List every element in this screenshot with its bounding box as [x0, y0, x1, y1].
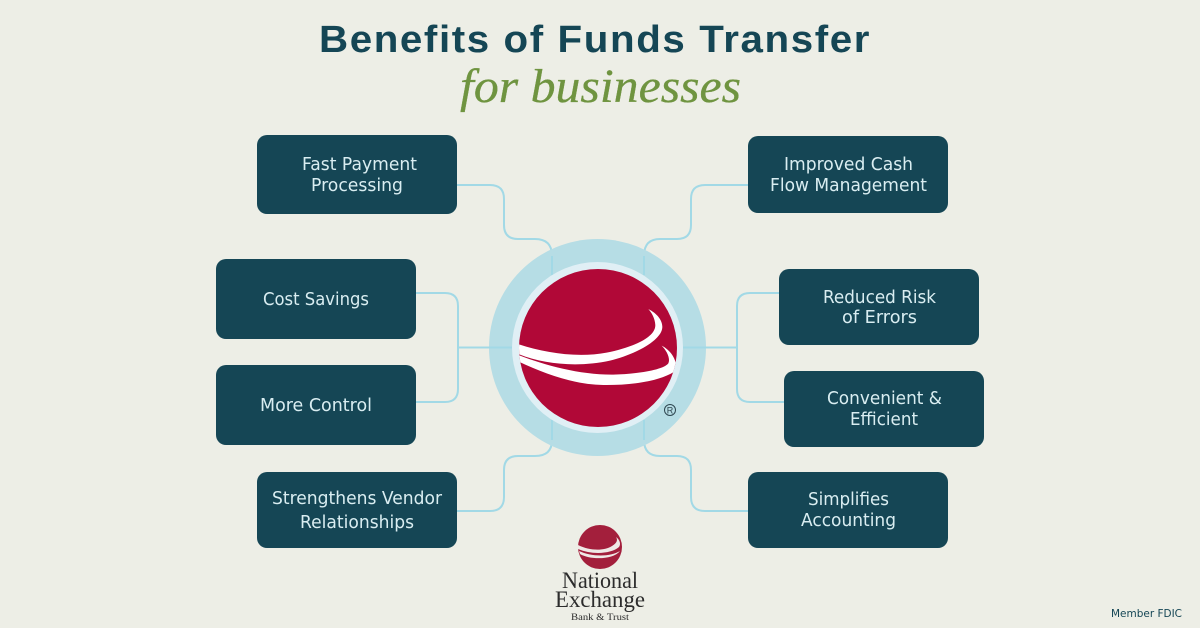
- box: Simplifies Accounting: Simplifies: [808, 489, 889, 510]
- registered mark: [664, 404, 676, 416]
- bank logo: Bank & Trust: [571, 613, 629, 623]
- box: Fast Payment Processing: [257, 135, 457, 214]
- box: Reduced Risk of Errors: Reduced Risk: [823, 287, 937, 308]
- box: More Control: [216, 365, 416, 445]
- box: Cost Savings: Cost Savings: [263, 289, 369, 310]
- title: [319, 19, 871, 113]
- box: Strengthens Vendor Relationships: [257, 472, 457, 548]
- icon: white swooshes: [517, 309, 677, 385]
- box: Simplifies Accounting: Accounting: [801, 510, 896, 531]
- box: Cost Savings: [216, 259, 416, 339]
- box: Improved Cash Flow Management: [748, 136, 948, 213]
- box: Strengthens Vendor Relationships: Strengthens Vendor: [272, 488, 443, 509]
- box: Strengthens Vendor Relationships: Relationships: [300, 512, 414, 533]
- box: Fast Payment Processing: Fast Payment: [302, 154, 417, 175]
- box: Simplifies Accounting: [748, 472, 948, 548]
- bank logo: National: [562, 568, 638, 593]
- connector lines: [416, 185, 784, 511]
- title: Benefits of Funds Transfer: [319, 19, 871, 61]
- box: More Control: More Control: [260, 395, 372, 416]
- bank logo: [555, 525, 645, 623]
- bank logo: Exchange: [555, 587, 645, 612]
- box: Improved Cash Flow Management: Improved Cash: [784, 154, 913, 175]
- box: Convenient & Efficient: Efficient: [850, 409, 918, 430]
- registered mark: R: [667, 406, 674, 416]
- member FDIC note: Member FDIC: [1111, 608, 1182, 620]
- subtitle: for businesses: [460, 60, 741, 113]
- box: Convenient & Efficient: [784, 371, 984, 447]
- box: Reduced Risk of Errors: of Errors: [842, 307, 917, 328]
- box: Reduced Risk of Errors: [779, 269, 979, 345]
- box: Improved Cash Flow Management: Flow Management: [770, 175, 927, 196]
- central globe emblem: [489, 239, 706, 456]
- box: Fast Payment Processing: Processing: [311, 175, 403, 196]
- box: Convenient & Efficient: Convenient &: [827, 388, 942, 409]
